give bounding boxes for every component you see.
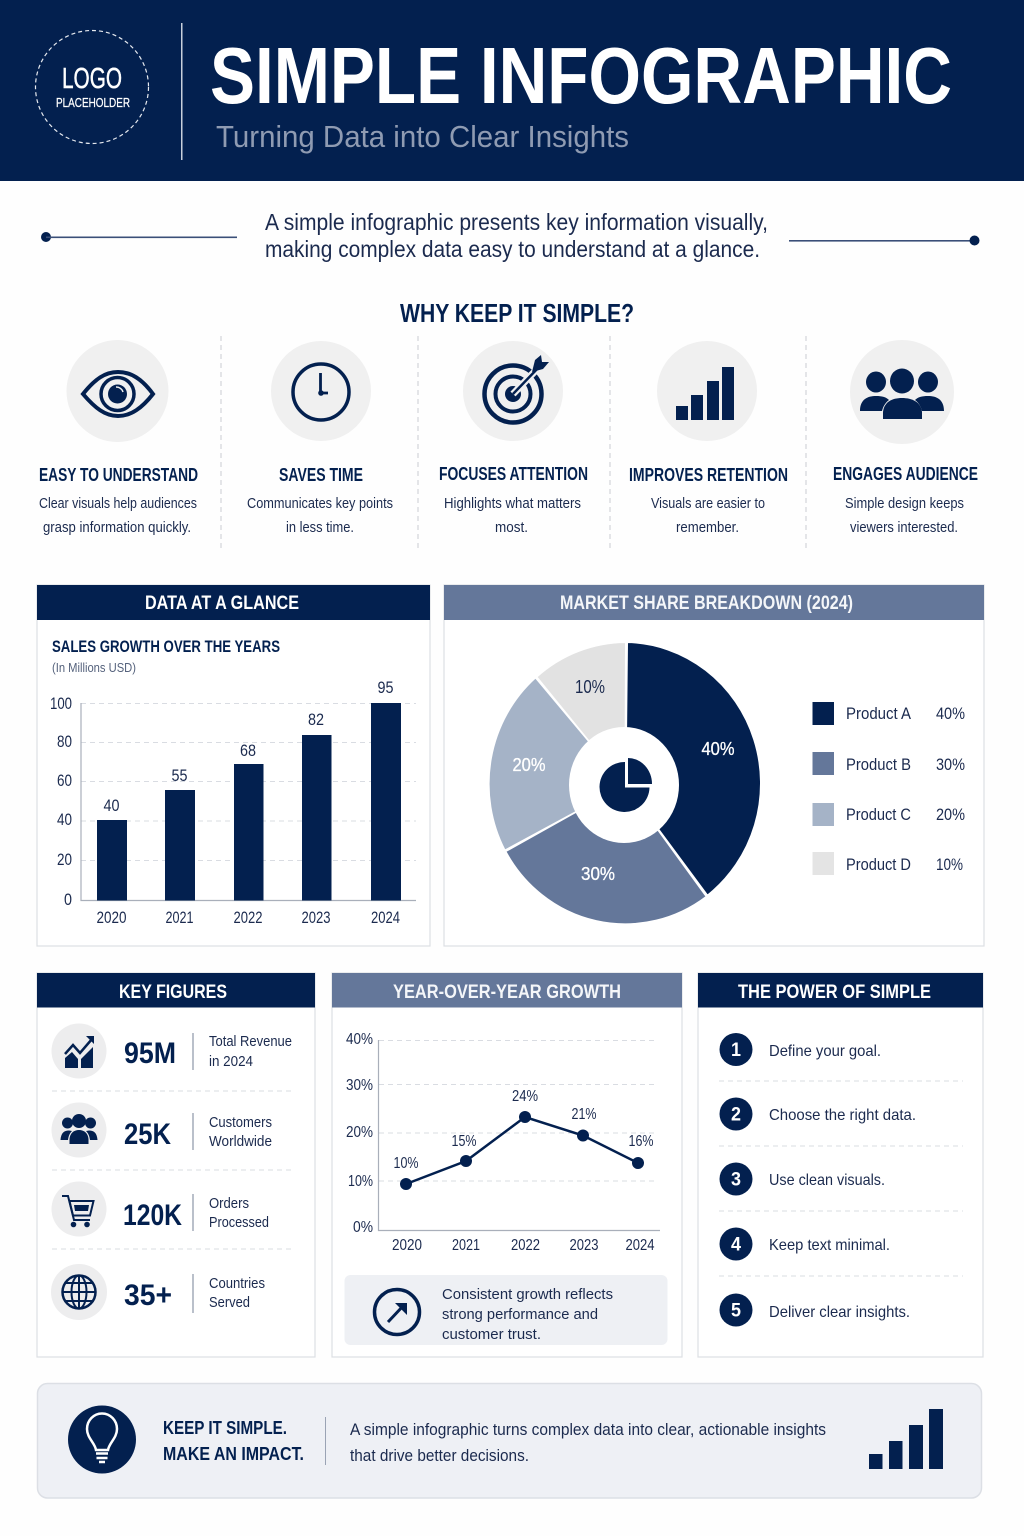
line chart: 2023 [570,1237,599,1254]
bar chart: 100 [50,695,72,713]
footer banner [38,1384,982,1498]
line chart: 20% [346,1124,373,1141]
step 5: Deliver clear insights. [769,1304,910,1321]
step 3: 3 [731,1170,741,1190]
line chart: 21% [572,1106,596,1123]
callout: consistent growth: Consistent growth reflects [442,1286,613,1303]
panel: the power of simple: THE POWER OF SIMPLE [738,982,931,1003]
benefit: easy to understand: EASY TO UNDERSTAND [39,465,198,485]
bar chart: 82 [308,711,324,729]
line chart: 2021 [452,1237,480,1254]
step 2 [720,1098,916,1130]
benefit: improves retention: remember. [676,519,739,536]
benefit: focuses attention: Highlights what matters [444,495,581,512]
intro statement [41,209,980,262]
step 1 [720,1033,881,1066]
callout: consistent growth: strong performance and [442,1306,598,1323]
panel: data at a glance: DATA AT A GLANCE [145,593,299,614]
bar chart: 2021 [166,909,194,927]
icon: target [463,341,563,441]
bar chart: 2024 [371,909,400,927]
step 2: Choose the right data. [769,1107,916,1124]
icon: mini pie [600,758,652,812]
figure: orders [52,1182,269,1236]
figure: orders: Processed [209,1215,269,1231]
panel: year-over-year growth [332,973,682,1357]
chart heading: SALES GROWTH OVER THE YEARS [52,638,280,656]
step 5: 5 [731,1300,741,1322]
benefit: engages audience: Simple design keeps [845,495,964,512]
icon: rising chart [52,1024,106,1078]
step 3 [720,1162,885,1196]
figure: orders: Orders [209,1196,249,1212]
bar chart: 2022 [234,909,262,927]
callout: consistent growth [344,1275,668,1345]
icon: people [850,340,954,444]
legend: 10% [936,856,963,874]
benefit: improves retention: IMPROVES RETENTION [629,465,788,485]
intro statement: A simple infographic presents key information visually, [265,209,768,235]
callout: consistent growth: customer trust. [442,1326,541,1343]
chart heading: (In Millions USD) [52,661,136,675]
legend: 30% [936,756,965,774]
icon: signal bars [869,1409,943,1469]
line chart: 2024 [626,1237,655,1254]
donut chart: 30% [581,863,615,884]
logo placeholder: LOGO [62,63,122,95]
donut chart: 10% [575,676,605,697]
benefit: saves time [247,341,393,536]
benefit: improves retention [629,341,788,536]
footer banner: KEEP IT SIMPLE. [163,1417,287,1438]
step 1: 1 [731,1040,741,1061]
figure: countries: Countries [209,1276,265,1292]
legend: 20% [936,806,965,824]
step 5 [720,1294,910,1326]
bar chart: 2020 [96,909,126,927]
benefit: improves retention: Visuals are easier to [651,495,765,512]
legend: Product B [846,756,911,774]
figure: orders: 120K [123,1199,182,1232]
line chart: 40% [346,1031,373,1048]
legend: Product D [846,856,911,874]
footer banner: that drive better decisions. [350,1447,529,1465]
step 2: 2 [731,1104,741,1126]
icon: globe [51,1264,107,1320]
panel: market share breakdown [444,585,984,946]
panel: key figures [37,973,315,1357]
logo placeholder [36,30,148,144]
icon: light bulb [68,1406,136,1474]
figure: revenue: Total Revenue [209,1034,292,1050]
donut chart: 40% [702,738,734,759]
figure: countries: 35+ [124,1279,172,1312]
bar chart: 68 [240,742,256,760]
panel: key figures: KEY FIGURES [119,982,227,1003]
benefit: focuses attention: most. [495,519,528,536]
intro statement: making complex data easy to understand at a glance. [265,236,760,262]
panel: the power of simple [698,973,983,1357]
bar chart: 0 [64,891,72,909]
icon: customers [52,1102,106,1158]
icon: cart [52,1182,106,1236]
footer banner: MAKE AN IMPACT. [163,1443,304,1464]
section heading: why keep it simple: WHY KEEP IT SIMPLE? [400,300,634,328]
benefit: engages audience: ENGAGES AUDIENCE [833,464,978,484]
header banner [0,0,1024,181]
line chart: 16% [628,1133,654,1150]
logo placeholder: PLACEHOLDER [56,95,130,110]
chart heading [52,638,280,675]
figure: countries [51,1264,265,1320]
bar chart: 40 [104,797,120,815]
line chart: 10% [348,1173,373,1190]
benefit: saves time: SAVES TIME [279,465,363,485]
benefit: engages audience: viewers interested. [850,519,958,536]
footer banner: A simple infographic turns complex data into clear, actionable insights [350,1421,826,1439]
legend: Product C [846,806,911,824]
figure: customers: 25K [124,1118,171,1151]
bar chart: 55 [172,767,188,785]
legend: Product A [846,705,911,723]
benefit: easy to understand: Clear visuals help audiences [39,495,197,512]
figure: countries: Served [209,1295,250,1311]
line chart: 30% [346,1077,373,1094]
benefit: engages audience [833,340,978,536]
line chart: 2022 [511,1237,540,1254]
step 4: Keep text minimal. [769,1237,890,1254]
step 4: 4 [731,1234,741,1256]
step 4 [720,1228,890,1260]
step 3: Use clean visuals. [769,1172,885,1189]
figure: customers [52,1102,272,1158]
panel: year-over-year growth: YEAR-OVER-YEAR GROWTH [393,982,621,1003]
legend: 40% [936,705,965,723]
figure: revenue [52,1024,292,1078]
figure: revenue: in 2024 [209,1054,253,1070]
icon: eye [66,340,168,442]
bar chart: 40 [57,811,72,829]
bar chart [50,679,416,927]
benefit: easy to understand [39,340,198,536]
benefit: saves time: Communicates key points [247,495,393,512]
icon: arrow in circle [374,1290,420,1334]
panel: market share breakdown: MARKET SHARE BREAKDOWN (2024) [560,593,853,614]
line chart: 24% [512,1088,538,1105]
subtitle: Turning Data into Clear Insights [216,119,629,154]
icon: clock [271,341,371,441]
benefit: focuses attention: FOCUSES ATTENTION [439,464,588,484]
icon: bar steps [657,341,757,441]
bar chart: 2023 [302,909,330,927]
figure: customers: Worldwide [209,1134,272,1150]
figure: revenue: 95M [124,1037,176,1070]
figure: customers: Customers [209,1115,272,1131]
donut chart: 20% [512,754,546,775]
bar chart: 60 [57,772,72,790]
bar chart: 80 [57,733,72,751]
line chart: 0% [353,1219,373,1236]
benefit: saves time: in less time. [286,519,354,536]
benefit: easy to understand: grasp information quickly. [43,519,191,536]
panel: data at a glance [37,585,430,946]
line chart [346,1031,660,1254]
line chart: 15% [452,1133,476,1150]
donut chart [489,642,761,924]
legend [812,702,965,875]
bar chart: 20 [57,851,72,869]
bar chart: 95 [378,679,394,697]
line chart: 2020 [392,1237,422,1254]
benefit: focuses attention [439,341,588,536]
line chart: 10% [394,1155,418,1172]
step 1: Define your goal. [769,1043,881,1060]
